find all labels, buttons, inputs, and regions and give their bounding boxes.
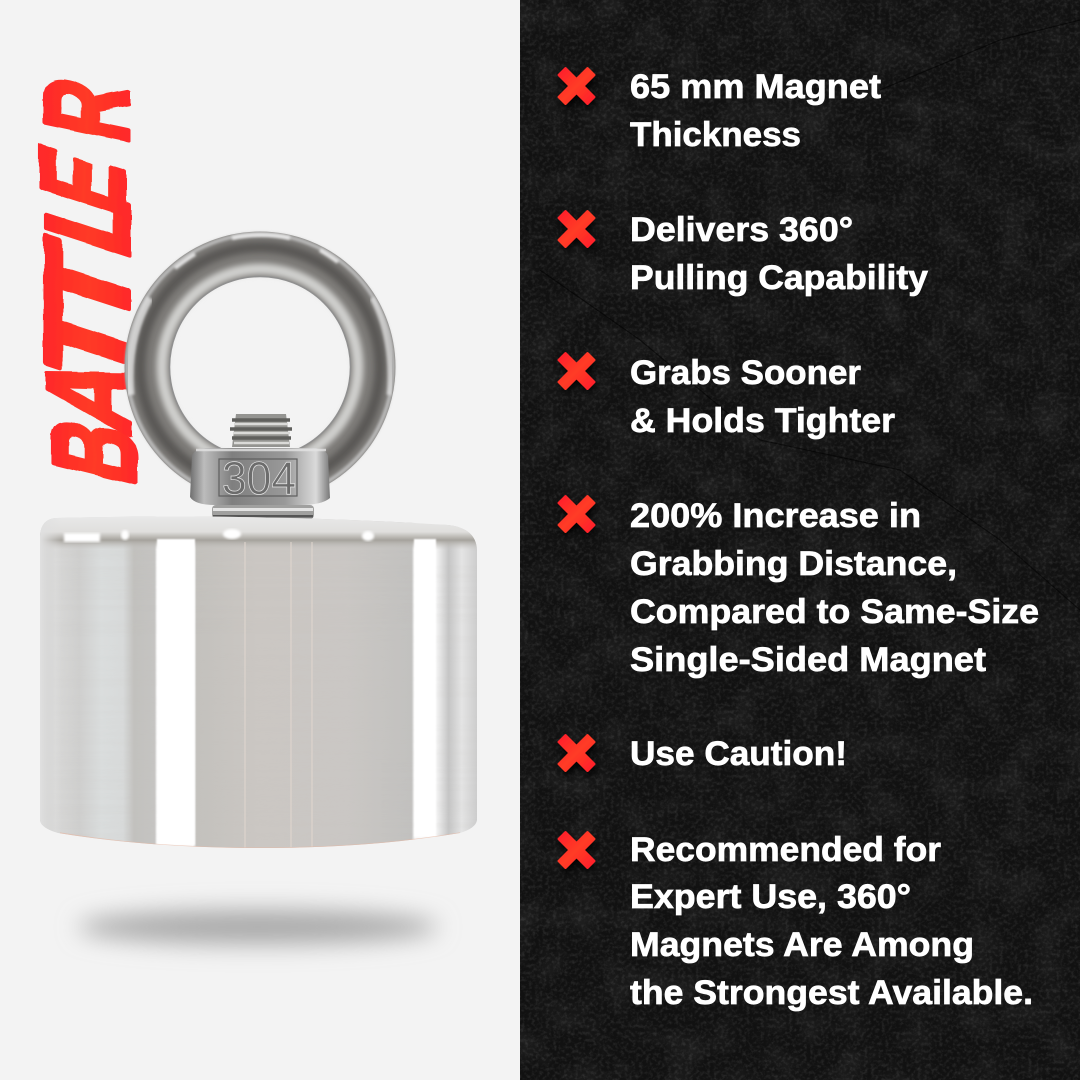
product: nut stamped 304: 304: [222, 452, 296, 504]
feature 2: icon and text: Pulling Capability: [630, 259, 928, 297]
floor shadow: [78, 910, 438, 944]
feature 6: icon and text: Expert Use, 360°: [630, 878, 911, 916]
feature 3: icon and text: Grabs Sooner: [630, 354, 861, 392]
brand wordmark: BATTLER: [17, 67, 162, 495]
feature 3: icon and text: & Holds Tighter: [630, 402, 895, 440]
feature 6: icon and text: [558, 831, 1033, 1012]
product: eye bolt ring: [127, 234, 393, 500]
brand wordmark: BATTLER: L: [22, 167, 155, 271]
product: threaded bolt: [230, 414, 292, 447]
brand wordmark: BATTLER: T: [22, 281, 155, 401]
feature 1: icon and text: 65 mm Magnet: [630, 68, 881, 106]
feature 2: icon and text: Delivers 360°: [630, 211, 853, 249]
left panel background: [0, 0, 520, 1080]
feature 6: icon and text: Recommended for: [630, 831, 941, 869]
brand wordmark: BATTLER: T: [22, 227, 155, 347]
feature 4: icon and text: Compared to Same-Size: [630, 593, 1039, 631]
right panel: dark stone texture: [520, 0, 1080, 1080]
brand wordmark: BATTLER: B: [28, 406, 162, 495]
feature 3: icon and text: [558, 353, 895, 440]
product: magnet body: [40, 510, 477, 850]
brand wordmark: BATTLER: E: [17, 133, 150, 229]
feature 4: icon and text: Grabbing Distance,: [630, 545, 957, 583]
feature 2: icon and text: [558, 211, 928, 297]
brand wordmark: BATTLER: R: [19, 67, 154, 151]
feature 4: icon and text: Single-Sided Magnet: [630, 641, 986, 679]
product: nut stamped 304: [190, 448, 330, 519]
feature 6: icon and text: Magnets Are Among: [630, 926, 974, 964]
feature 1: icon and text: [558, 68, 881, 154]
feature 6: icon and text: the Strongest Available.: [630, 974, 1033, 1012]
feature 4: icon and text: 200% Increase in: [630, 497, 921, 535]
brand wordmark: BATTLER: A: [21, 341, 155, 445]
feature 4: icon and text: [558, 496, 1039, 679]
feature 1: icon and text: Thickness: [630, 116, 801, 154]
feature 5: icon and text: Use Caution!: [630, 735, 847, 773]
